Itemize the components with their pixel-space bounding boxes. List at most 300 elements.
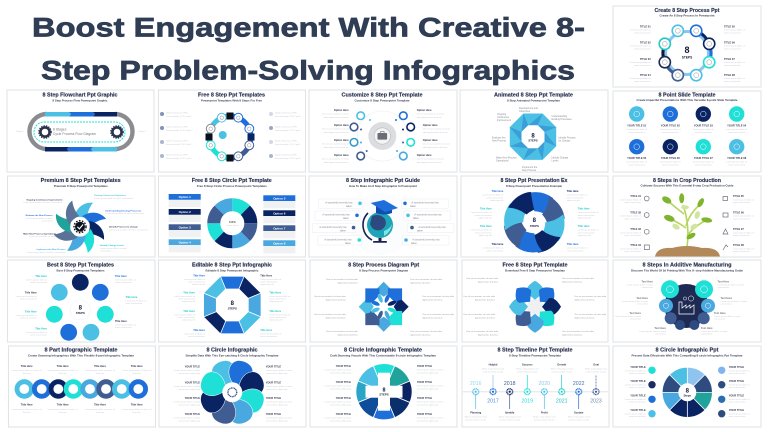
part labels bottom: Lorem ipsum dolor sit amet, sit [85,409,115,411]
right options text: odio dignissimos ducimus [423,147,449,149]
flower labels: Use sit accusantius sit iusto odio [326,279,358,281]
octagon left labels: amet consectetur [178,298,195,300]
timeline years: 2016 [470,381,482,387]
octagon right labels: Title Here [269,309,282,313]
flower labels: dignissimos ducimus [338,282,359,284]
panel: 8 circle ppt [613,346,761,427]
pinwheel left labels: Lorem ipsum dolor sit [471,230,492,232]
panel: create process: Create 8 Step Process Ppt [654,8,720,14]
pie ring: Steps [683,394,692,398]
additive right labels: Text Here [720,296,733,300]
plant illustration [655,193,720,256]
left list: lomo brooklyn YOLO pickl [166,115,192,118]
additive right labels: consectetur [701,333,713,336]
circle labels: amet consectetur [662,163,679,166]
panel: 8 step flowchart [7,90,154,172]
orbit left labels: Title Here [25,310,37,314]
flower labels: dignissimos ducimus [410,282,431,284]
timeline top labels: achieve better results [483,370,504,373]
additive right labels [701,280,747,336]
racetrack flow diagram: Cycle Process Flow Diagram [53,132,96,136]
right options text: Option Here [423,138,438,142]
octagon labels: Make New Process [496,156,517,160]
additive left labels: Text Here [641,280,654,284]
circle labels: YOUR TITLE 04 [727,124,747,128]
pie right labels: Lorem ipsum dolor sit [729,370,750,372]
right pills [402,199,454,245]
right pills: A wonderful serenity has [412,238,440,241]
left options text: Use sit accusantius sit iusto [322,158,349,160]
pie left labels: YOUR TITLE [630,365,646,369]
additive right labels: Text Here [718,280,730,284]
pie right labels: amet consectetur [729,415,746,418]
main title: Step Problem-Solving Infographics [41,55,575,85]
panel: process diagram: 8 Step Process Powerpoint Diagram [359,268,409,272]
left list: Synth chartreuse VHS, [166,140,188,142]
process right text [724,24,745,83]
crop right labels: TITLE 07 [733,227,744,231]
octagon left labels: amet consectetur [178,316,195,319]
crop right labels [733,194,754,253]
swirl left labels: Evaluate the New Process [26,214,53,217]
right list: lomo brooklyn YOLO pickl [275,143,301,146]
orbit left labels: Title Here [35,327,48,331]
orbit left labels: amet consectetur [30,334,47,337]
swirl right labels: Identify Process for change [109,226,138,229]
timeline bottom labels: Sustain [574,410,584,414]
part labels top: Lorem ipsum dolor sit amet, sit [85,370,115,372]
swirl left labels: Implement the New Process [37,248,66,251]
panel: animated octagon: Animated 8 Step Ppt Template [494,93,573,99]
circle labels: Lorem ipsum dolor sit [693,129,714,131]
panel: free 8 step ring: Free 8 Step Ppt Templates [198,93,265,99]
flower labels: Use sit accusantius sit iusto odio [422,314,454,316]
panel: best templates: Best 8 Step Powerpoint Templates [56,268,105,272]
orbit right labels: amet consectetur [126,302,143,305]
timeline bottom labels: achieve better results [465,418,487,421]
petal right labels: Lorem ipsum dolor sit amet [266,386,292,388]
crop right labels: TITLE 08 [733,243,744,247]
racetrack flow diagram: 8 Stages [53,128,67,132]
template left labels: YOUR TITLE [336,412,351,416]
panel: premium swirl: Premium 8 Step Powerpoint Templates [54,184,108,188]
template left labels: consectetur adipiscing [329,388,352,390]
petal labels: Use sit accusantius sit iusto odio [463,296,495,298]
crop left labels: amet consectetur [624,217,641,220]
pie right labels [729,365,750,418]
petal right labels: YOUR TITLE [266,396,281,400]
left options text: Use sit accusantius sit iusto [322,128,349,130]
circle labels: YOUR TITLE 01 [627,124,647,128]
left list: lomo brooklyn YOLO pickl [166,143,192,146]
left options text [322,108,350,164]
process left text: amet consectetur [634,64,651,67]
panel: free 8 step ring: Powerpoint Templates With 8 Steps For Free [201,99,262,103]
panel: 8 step flowchart: 8 Step Flowchart Ppt Graphic [42,93,118,99]
pinwheel left labels: amet consectetur [475,231,492,234]
pinwheel right labels: Title Here [578,224,590,228]
panel: additive manufacturing [613,260,761,342]
template right labels: consectetur adipiscing [417,404,439,406]
swirl left labels [23,198,66,254]
octagon labels: Evaluate the [492,136,505,140]
template left labels: Lorem ipsum dolor sit amet [325,370,351,372]
octagon labels: Existing Processes [552,118,573,121]
pinwheel left labels: adipiscing elit [490,199,504,202]
swirl right labels: Lorem ipsum dolor sit amet, consectetur [109,228,148,231]
left pills: taken [343,217,350,220]
process left text: Lorem ipsum dolor sit [630,30,651,32]
timeline bottom labels: Make a big impact and [465,416,487,418]
racetrack flow diagram: Stage 5 [138,130,147,133]
pie ring: 8 [686,388,690,394]
additive right labels: Text Here [714,311,726,315]
pinwheel left labels: amet consectetur [475,214,492,217]
template right labels: YOUR TITLE [417,364,432,368]
octagon left labels: Lorem ipsum dolor sit [174,296,195,298]
process right text: TITLE 08 [724,73,735,77]
additive left labels: consectetur [630,318,641,321]
octagon labels: Operational [496,160,509,162]
additive left labels: Lorem ipsum dolor sit amet [640,331,666,333]
part labels bottom: Sed non [133,412,142,414]
panel: 8 circle template: 8 Circle Infographic Template [344,348,422,354]
petal right labels [266,364,292,422]
process ring: STEPS [682,55,692,59]
petal left labels: YOUR TITLE [185,396,200,400]
flower labels: dignissimos ducimus [422,299,443,301]
octagon labels: Improvement [497,119,511,122]
pinwheel right labels: Lorem ipsum dolor sit [567,248,588,250]
left options text: Option Here [334,138,349,142]
flower labels: Use sit accusantius sit iusto odio [314,314,346,316]
pinwheel left labels: Title Here [492,242,504,246]
timeline years: 2020 [539,381,550,387]
right options text: Use sit accusantius sit iusto [417,114,444,116]
additive right labels: Lorem ipsum dolor sit amet [701,331,727,333]
template left labels: consectetur adipiscing [329,372,352,374]
left pills: A wonderful serenity has [322,214,350,217]
circle labels: amet consectetur [628,163,645,166]
panel: free circle: Free 8 Step Circle Ppt Template [192,178,272,184]
right options text: Use sit accusantius sit iusto [423,144,450,146]
panel: timeline: 8 Step Timeline Ppt Template [498,348,573,354]
additive left labels: Text Here [629,311,642,315]
timeline bottom labels: Make a big impact and [568,416,590,418]
template right labels: consectetur adipiscing [417,388,439,390]
template left labels: consectetur adipiscing [329,420,352,422]
panel: editable octagon: Editable 8 Step Ppt Infographic [192,263,272,269]
octagon labels: Development and [519,107,538,110]
panel: premium swirl [8,176,155,257]
ring diagram [206,112,254,162]
left options: Option 4 [179,240,191,244]
orbit right labels: amet consectetur [115,281,132,284]
left list: lomo brooklyn YOLO pickl [166,157,192,160]
petal left labels: consectetur adipiscing [178,404,201,406]
crop right labels: amet consectetur [733,201,750,204]
panel: additive manufacturing: 8 Steps In Additive Manufacturing [642,263,732,269]
part labels bottom: Sed non [59,412,68,414]
orbit left labels: Lorem ipsum dolor sit [26,332,47,334]
octagon left labels: adipiscing elit [182,319,195,322]
octagon right labels: Lorem ipsum dolor sit [269,314,290,316]
panel: timeline: 8 Step Timeline Powerpoint Template [509,353,561,357]
process left text: TITLE 02 [640,40,651,44]
timeline top labels: achieve better results [517,370,539,373]
right pills: taken [417,229,424,232]
pinwheel left labels: amet consectetur [487,249,504,252]
process right text: TITLE 05 [724,24,735,28]
octagon right labels: amet consectetur [269,316,286,319]
timeline top labels [482,362,608,373]
flower diagram [358,281,409,332]
swirl left labels: Lorem ipsum dolor sit amet, consectetur [27,251,66,254]
chain of rings [17,382,146,396]
additive left labels: consectetur [637,303,648,306]
timeline years: 2019 [522,398,533,404]
circle labels: Lorem ipsum dolor sit [693,162,714,164]
petal right labels: YOUR TITLE [266,364,281,368]
right options text [417,108,450,164]
pie left labels [625,365,646,418]
pinwheel left labels: Title Here [492,189,504,193]
pie left labels: Lorem ipsum dolor sit [625,370,646,372]
right options: Option 8 [273,241,286,245]
octagon segments [204,276,261,334]
circle orbit: 8 [79,306,83,312]
orbit left labels: Lorem ipsum dolor sit [16,296,37,298]
left list [160,112,192,160]
pinwheel right labels: amet consectetur [578,214,595,217]
circle orbit [46,274,114,341]
pie right labels: YOUR TITLE [729,408,744,412]
additive left labels: Lorem ipsum dolor sit amet [627,284,653,286]
orbit left labels: amet consectetur [30,281,47,284]
flower labels: dignissimos ducimus [338,334,359,336]
octagon labels: New Process [492,140,507,142]
right options text: odio dignissimos ducimus [417,117,443,119]
part labels top: Sed non [133,373,142,375]
left options text: odio dignissimos ducimus [324,132,350,134]
template left labels: YOUR TITLE [336,364,351,368]
left options text: odio dignissimos ducimus [324,162,350,164]
right options text: Use sit accusantius sit iusto [417,158,444,160]
process left text: Lorem ipsum dolor sit [630,62,651,64]
circle labels: amet consectetur [695,131,712,134]
crop left labels: TITLE 02 [630,210,642,214]
part labels bottom: Sed non [23,412,32,414]
pinwheel left labels: Lorem ipsum dolor sit [471,212,492,214]
pie left labels: amet consectetur [629,415,646,418]
left options [169,194,201,252]
left list: Synth chartreuse VHS, [166,112,188,114]
right options text: Option Here [417,153,432,157]
flower labels: Use sit accusantius sit iusto odio [410,279,442,281]
timeline top labels: Make a big impact and [516,368,538,370]
octagon left labels: Title Here [193,328,206,332]
additive left labels: Lorem ipsum dolor sit amet [615,316,641,318]
circle labels: YOUR TITLE 02 [661,124,680,128]
octagon right labels: Title Here [260,328,273,332]
process right text: Lorem ipsum dolor sit [724,78,745,80]
racetrack flow diagram [16,112,147,152]
octagon right labels [260,274,291,338]
process right text: amet consectetur [724,64,741,67]
octagon labels: Implement the [522,166,537,169]
panel: create process [613,6,761,87]
segmented circle with cross: STEPS [379,393,389,397]
racetrack flow diagram: Stage 1 [16,130,25,133]
puzzle circle: Lorem ipsum [226,224,239,227]
timeline bottom labels [465,410,590,421]
octagon right labels: adipiscing elit [260,283,274,286]
swirl right labels: Understanding Existing Processes [105,209,142,212]
panel: 8 circle ppt: Present Data Effectively With This Compelling 8-circle Infographic Ppt Template [632,353,743,357]
part labels top: Title Here [21,364,33,368]
circle labels: YOUR TITLE 05 [627,156,647,160]
right options [263,195,295,253]
part labels bottom: Sed non [96,412,105,414]
pinwheel right labels: adipiscing elit [567,199,580,202]
timeline top labels: Goal [593,362,599,366]
part labels bottom: Title Here [57,403,69,407]
template right labels: Lorem ipsum dolor sit amet [417,370,443,372]
process left text: TITLE 04 [640,73,651,77]
panel: additive manufacturing: Discover The World Of 3d Printing With This 8- step Additive Manufacturing Guide [631,268,743,272]
panel: customize template: Customize 8 Step Powerpoint Template [354,99,410,103]
part labels top: Title Here [57,364,69,368]
right list: Synth chartreuse VHS, [275,112,297,114]
octagon labels [492,107,576,172]
petal labels: Use sit accusantius sit iusto odio [562,278,594,280]
side dots [648,367,725,417]
panel: best templates [8,260,155,342]
left options text: odio dignissimos ducimus [324,117,350,119]
circle labels: Lorem ipsum dolor sit [726,162,747,164]
orbit right labels [115,274,147,329]
panel: presentation example: 8 Step Ppt Presentation Ex [500,178,568,184]
additive left labels: Lorem ipsum dolor sit amet [622,301,648,303]
panel: 8 circle infographic: Simplify Data With This Eye-catching 8 Circle Infographic Template [186,353,279,357]
petal left labels: consectetur adipiscing [178,388,201,391]
panel: 8 circle infographic [159,346,306,427]
orbit right labels: Title Here [115,319,127,323]
connector dots [360,119,404,152]
factory cluster [659,280,715,330]
left options text: Use sit accusantius sit iusto [322,144,349,146]
flower labels: dignissimos ducimus [326,299,347,301]
panel: create process: Create An 8 Step Process In Powerpoint [660,14,714,18]
additive right labels: consectetur [720,303,732,306]
part labels bottom: Title Here [94,403,106,407]
right list: lomo brooklyn YOLO pickl [275,157,301,160]
puzzle circle [202,193,262,253]
pie left labels: amet consectetur [629,372,646,375]
overlapping petals [197,357,267,427]
part labels top: Lorem ipsum dolor sit amet, sit [48,370,78,372]
swirl right labels: Lorem ipsum dolor sit amet, consectetur [94,197,133,200]
petal labels: Use sit accusantius sit iusto odio [466,278,498,280]
orbit left labels: Lorem ipsum dolor sit [16,315,37,317]
timeline top labels: Make a big impact and [482,368,504,370]
crop right labels: amet consectetur [733,234,750,237]
octagon labels: Identify Change [552,156,568,160]
crop left labels: TITLE 01 [630,194,642,198]
option circles [350,112,415,160]
orbit left labels: Title Here [35,274,48,278]
process ring: 8 [684,45,690,55]
timeline top labels: Success [522,362,533,366]
timeline top labels: Growth [557,362,567,366]
octagon labels: Identify Process [558,136,576,140]
panel: editable octagon: Editable 8 Step Powerpoint Infographic [206,268,259,272]
timeline years [470,381,602,404]
panel: infographic guide: How To Make An 8 Step Infographic In Powerpoint [349,184,417,188]
process left text: TITLE 01 [640,24,651,28]
main title [32,13,585,85]
octagon right labels: Title Here [269,290,282,294]
additive left labels: Text Here [654,326,667,330]
crop left labels: amet consectetur [624,234,641,237]
circle labels: amet consectetur [662,131,679,134]
flower labels: Use sit accusantius sit iusto odio [314,296,346,298]
orbit right labels: Lorem ipsum dolor sit [115,324,136,326]
circle labels [626,124,748,166]
octagon right labels: Title Here [260,274,273,278]
additive right labels: Lorem ipsum dolor sit amet [720,301,747,303]
octagon left labels: Title Here [193,274,206,278]
timeline top labels: Helpful [489,362,498,366]
octagon left labels [174,274,206,338]
circle labels: Lorem ipsum dolor sit [626,129,647,131]
template left labels: Lorem ipsum dolor sit amet [325,418,351,420]
pinwheel right labels: Title Here [578,206,590,210]
process right text: TITLE 07 [724,57,735,61]
panel: timeline [462,346,609,427]
flower labels: dignissimos ducimus [326,317,347,319]
additive left labels [615,280,667,336]
swirl right labels: Identify Change Levels [100,244,125,247]
octagon right labels: amet consectetur [260,280,277,284]
panel: free 8 step ring [158,90,306,172]
petal labels: Use sit accusantius sit iusto odio [574,314,606,316]
left pills: A wonderful serenity has [324,238,352,241]
circle orbit: STEPS [76,311,85,315]
pinwheel left labels: adipiscing elit [479,234,492,237]
swirl right labels: Lorem ipsum dolor sit amet, consectetur [105,212,144,215]
crop step icons [644,196,728,250]
panel: crop production [613,176,761,257]
left pills [312,199,362,245]
panel: free 8 step petals: Free 8 Step Ppt Template [502,263,568,269]
part labels top: Sed non [59,373,68,375]
part labels top [12,364,152,375]
panel: crop production: 8 Steps In Crop Production [653,178,721,184]
pie left labels: YOUR TITLE [630,379,646,383]
timeline years: 2023 [590,398,602,404]
part labels top: Lorem ipsum dolor sit amet, sit [12,370,42,372]
octagon left labels: amet consectetur [188,335,205,338]
template right labels: YOUR TITLE [417,396,432,400]
octagon right labels: adipiscing elit [269,319,283,322]
octagon left labels: amet consectetur [188,280,205,284]
template right labels: Lorem ipsum dolor sit amet [417,418,443,420]
timeline bottom labels: Make a big impact and [499,416,521,418]
crop right labels: Lorem ipsum dolor sit [733,232,754,234]
crop right labels: Lorem ipsum dolor sit [733,216,754,218]
process left text: amet consectetur [634,48,651,50]
